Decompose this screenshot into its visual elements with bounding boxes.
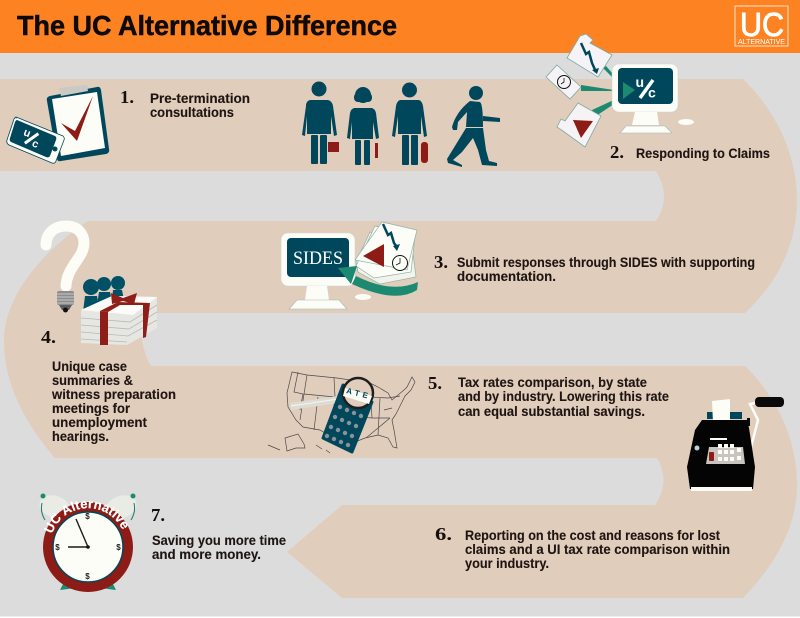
icon: adding machine (687, 397, 784, 491)
step 4 text: meetings for (52, 401, 131, 416)
step 5 number: 5. (428, 373, 442, 393)
step 6 number: 6. (435, 524, 452, 544)
icon: clipboard and phone: u (22, 127, 32, 140)
icon: question mark bulb with people and gift-wrapped case file (46, 226, 157, 345)
magnifier handle (290, 395, 346, 410)
icon: SIDES monitor with papers: SIDES (293, 248, 343, 269)
icon: SIDES monitor with papers (281, 222, 418, 309)
logo: UC (740, 6, 784, 43)
figure: man with bag (302, 82, 339, 164)
step 4 text: unemployment (52, 415, 147, 430)
icon: alarm clock: $ (85, 512, 90, 521)
icon: alarm clock (40, 494, 136, 592)
step 6 text: Reporting on the cost and reasons for lost (465, 528, 720, 543)
icon: alarm clock: $ (116, 543, 121, 552)
logo glyph on screen (636, 74, 656, 100)
header banner (0, 0, 800, 53)
step 5 text: and by industry. Lowering this rate (458, 389, 669, 404)
magnifier lens with rate strip (343, 378, 373, 408)
icon: alarm clock: $ (85, 572, 90, 581)
step 7 text: Saving you more time (152, 533, 286, 548)
step 4 text: witness preparation (51, 387, 176, 402)
bulb base (57, 291, 74, 312)
icon: US map with calculator and magnifier (268, 372, 415, 453)
icon: monitor with incoming documents (546, 34, 694, 147)
figure: man with case (392, 82, 428, 165)
step 3 text: Submit responses through SIDES with supporting (457, 255, 755, 270)
logo: ALTERNATIVE (738, 39, 785, 46)
step 2 text: Responding to Claims (636, 146, 770, 161)
step 1 number: 1. (120, 87, 134, 107)
US map outline (268, 372, 415, 453)
icon: clipboard and phone: c (30, 138, 40, 151)
figure: woman with bag (347, 87, 379, 165)
step 3 text: documentation. (457, 269, 556, 284)
step 5 text: can equal substantial savings. (458, 404, 645, 419)
icon: clipboard and phone (7, 85, 109, 163)
connector wedges (581, 66, 620, 116)
step 4 number: 4. (41, 327, 56, 347)
step 7 number: 7. (151, 505, 165, 525)
magnifier lens with rate strip: ATE (345, 386, 370, 400)
step 7 text: and more money. (152, 547, 261, 562)
step 1 text: Pre-termination (150, 91, 250, 106)
step 3 number: 3. (434, 252, 448, 272)
step 1 text: consultations (150, 105, 234, 120)
logo glyph on screen: c (648, 84, 656, 100)
step 2 number: 2. (610, 142, 624, 162)
figure: walking man (447, 86, 500, 167)
step 6 text: your industry. (465, 556, 549, 571)
icon: alarm clock: $ (55, 543, 60, 552)
clock ring label: UC Alternative (44, 501, 128, 532)
gift box (81, 293, 157, 345)
step 6 text: claims and a UI tax rate comparison within (465, 542, 730, 557)
calculator (323, 385, 372, 452)
three people silhouettes (83, 276, 125, 312)
logo glyph on screen: u (636, 74, 644, 90)
step 4 text: Unique case (52, 359, 127, 374)
step 4 text: hearings. (52, 429, 109, 444)
icon: four employees (302, 82, 500, 167)
title: The UC Alternative Difference (17, 10, 397, 41)
step 4 text: summaries & (52, 373, 133, 388)
step 5 text: Tax rates comparison, by state (458, 375, 647, 390)
